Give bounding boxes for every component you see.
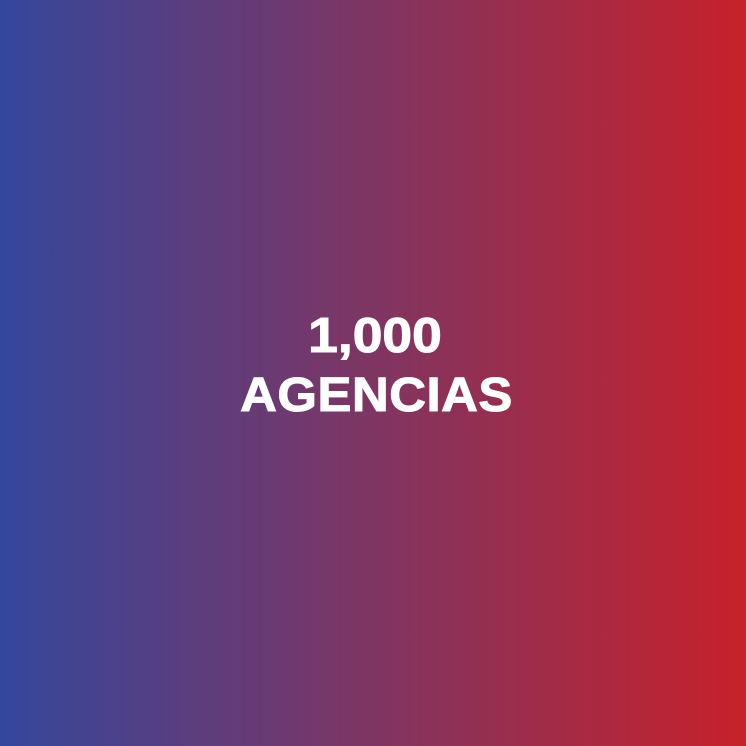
number: 1,000: 1,000 xyxy=(308,309,442,363)
heading: 1,000 AGENCIAS xyxy=(240,309,513,422)
label: AGENCIAS: AGENCIAS xyxy=(240,369,513,422)
